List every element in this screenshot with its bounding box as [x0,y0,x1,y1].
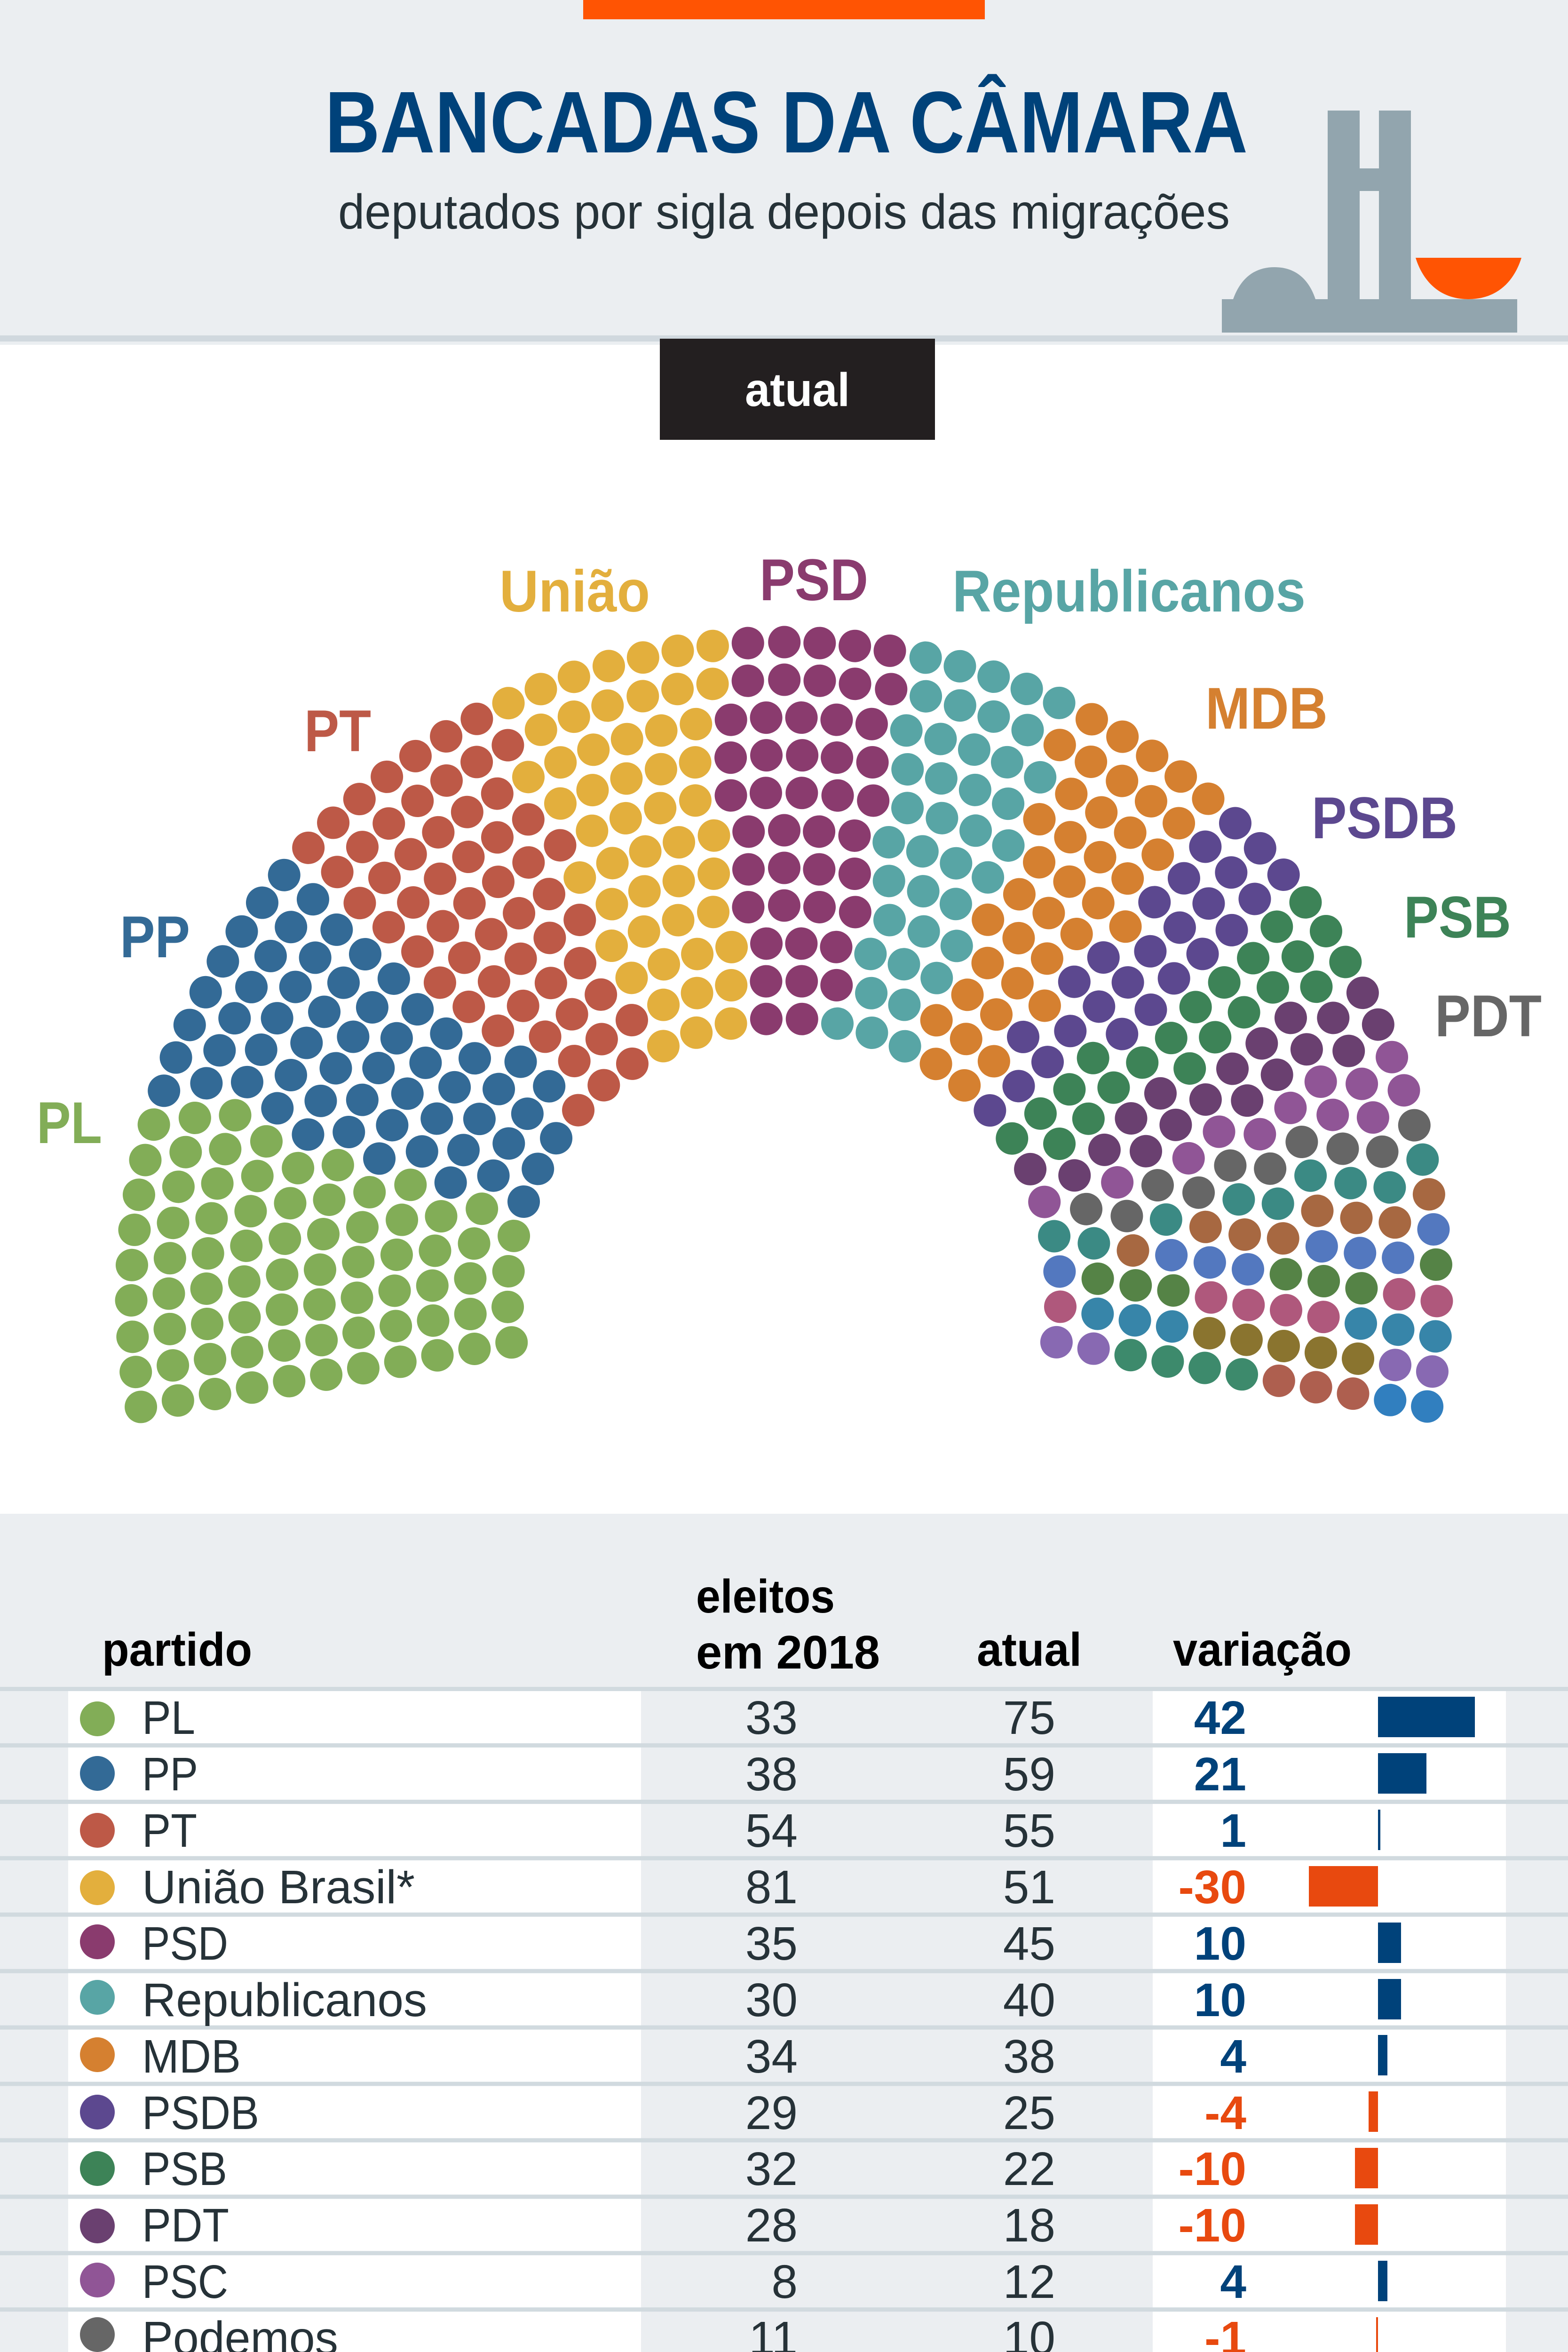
row: União Brasil: União Brasil* [142,1861,415,1914]
label: PSD: PSD [760,548,868,613]
tab: atual [660,339,935,440]
row: PT [80,1804,1380,1857]
row: PSDB: 29 [745,2087,798,2139]
panel: header [0,0,1568,345]
seats: Cidadania [1075,1235,1458,1415]
tab: atual: atual [745,364,850,416]
seats: PSB [956,872,1392,1176]
row: PT: PT [142,1804,197,1857]
row: PSD: 35 [745,1917,798,1970]
seats: PSC [1008,1034,1433,1224]
row: União Brasil: 81 [745,1861,798,1914]
label: Republicanos: Republicanos [952,559,1306,624]
seats: PL [74,1042,555,1426]
row: PSB: 32 [745,2143,798,2195]
row: PDT: 28 [745,2199,798,2252]
seats: MDB [856,675,1276,1116]
row: PL [80,1692,1475,1744]
seats: Pros [1186,1286,1381,1406]
label: PSDB: PSDB [1312,786,1457,851]
row: Republicanos [80,1974,1401,2026]
seats: PC do B [1038,1221,1458,1387]
title: BANCADAS DA CÂMARA [325,74,1248,171]
row: MDB: 38 [1003,2030,1055,2083]
row: PL: 33 [745,1692,798,1744]
row: PSC: 4 [1220,2256,1246,2308]
seats: PTB [1255,1344,1377,1430]
seats: Avante [1077,1200,1459,1354]
row: PSC: 8 [771,2256,798,2308]
seats: PT [266,678,670,1175]
row: PP [80,1748,1426,1801]
row: PT: 1 [1220,1804,1246,1857]
seats: PP [105,810,594,1285]
row: PDT: PDT [142,2199,229,2252]
row: PSDB: -4 [1204,2087,1246,2139]
row: Republicanos: 40 [1003,1974,1055,2026]
panel: table background [0,1514,1568,2352]
subtitle: deputados por sigla depois das migrações [338,185,1230,239]
row: PL: 75 [1003,1692,1055,1744]
row: MDB: 34 [745,2030,798,2083]
row: PDT: 18 [1003,2199,1055,2252]
row: PDT: -10 [1178,2199,1246,2252]
label: PT: PT [304,699,371,764]
row: PP: PP [142,1748,198,1801]
row: PSB: PSB [142,2143,227,2195]
row: União Brasil: -30 [1178,1861,1246,1914]
row: PT: 55 [1003,1804,1055,1857]
row: PL: PL [142,1692,195,1744]
row: MDB: 4 [1220,2030,1246,2083]
table header: variação [1173,1623,1352,1676]
label: PSB: PSB [1404,885,1511,950]
seats: PSD [681,598,973,1048]
chart: hemicycle seats [10,521,1485,1647]
seats: PSDB [923,790,1340,1136]
row: PP: 38 [745,1748,798,1801]
seats: Patriota [1107,1313,1266,1416]
table header: partido [102,1623,252,1676]
seats: Psol [1039,1187,1457,1336]
seats: PV [1032,1255,1456,1458]
table header: eleitos [696,1570,835,1623]
seats: União Brasil [482,626,799,1085]
seats: Novo [1112,1169,1452,1287]
seats: Podemos [1061,1102,1441,1243]
seats: PDT [987,968,1418,1205]
row: PSC: PSC [142,2256,228,2308]
row: Republicanos: Republicanos [142,1974,427,2026]
row: PL: 42 [1194,1692,1246,1744]
label: MDB: MDB [1205,676,1328,741]
row: PSD: 10 [1194,1917,1246,1970]
row: Podemos [80,2312,1378,2352]
row: PT: 54 [745,1804,798,1857]
row: PSC [80,2256,1387,2308]
table header: em 2018 [696,1626,880,1679]
table column stripes [68,1689,1506,2352]
table header: atual [977,1623,1082,1676]
row: PSDB [80,2087,1378,2139]
seats: Rede [1366,1370,1451,1437]
row: PSC: 12 [1003,2256,1055,2308]
row: MDB: MDB [142,2030,241,2083]
label: União: União [499,559,650,624]
seats: Republicanos [754,612,1139,1083]
row: PDT [80,2199,1378,2252]
row: Republicanos: 10 [1194,1974,1246,2026]
row: MDB [80,2030,1387,2083]
table header [102,1570,1352,1679]
label: PDT: PDT [1435,984,1542,1049]
row: PSDB: PSDB [142,2087,259,2139]
row: União Brasil [80,1861,1378,1914]
row: Republicanos: 30 [745,1974,798,2026]
row: PSB: 22 [1003,2143,1055,2195]
label: PL: PL [37,1090,102,1156]
label: PP: PP [120,905,190,970]
seats: Solidariedade [1032,1136,1447,1269]
row: PSB [80,2143,1378,2195]
row: PP: 59 [1003,1748,1055,1801]
row: PSD [80,1917,1401,1970]
row: União Brasil: 51 [1003,1861,1055,1914]
icon: national congress [1222,111,1521,333]
row: PSD: 45 [1003,1917,1055,1970]
row: PSDB: 25 [1003,2087,1055,2139]
row: PP: 21 [1194,1748,1246,1801]
row: PSB: -10 [1178,2143,1246,2195]
row: PSD: PSD [142,1917,228,1970]
